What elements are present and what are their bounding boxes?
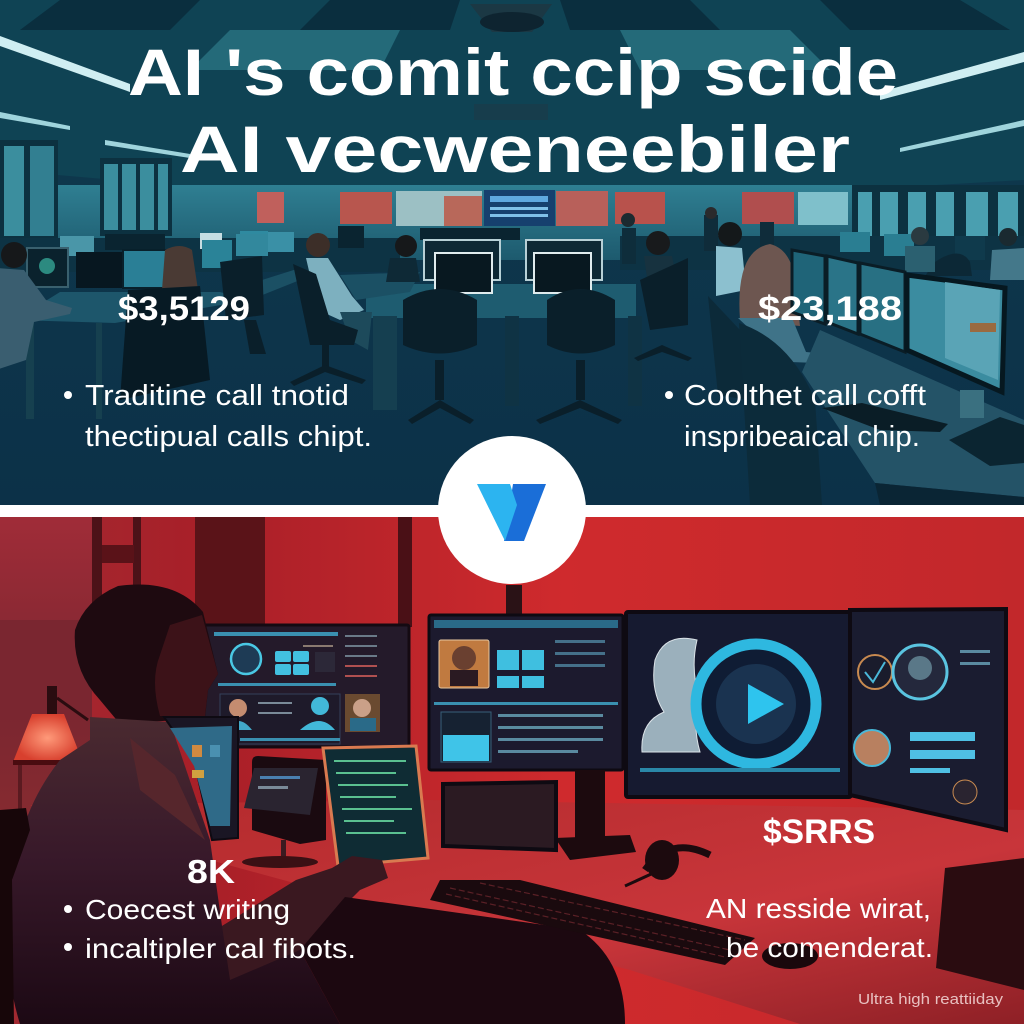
left desks and monitors [15,234,420,419]
divider band [0,505,1024,517]
icon: V logo badge [438,436,586,584]
window and wall columns [0,517,522,857]
person's arm and hand [222,856,388,980]
ceiling [0,0,1024,190]
bullet text: right [665,380,926,453]
monitor: centre dashboard [429,615,623,770]
office chairs [220,256,822,505]
title [128,35,898,186]
chair foreground [300,897,625,1024]
tablets and devices [164,717,556,868]
central desks with monitors [366,240,642,410]
bullet text: left [64,380,372,453]
text block: right: be comenderat. [726,932,933,963]
stat: right value: $23,188 [758,290,902,328]
text block: right: AN resside wirat, [706,893,931,924]
right desk and monitor row [792,250,1024,505]
bullet text: left: Traditine call tnotid [85,380,349,412]
seated agents on the left [0,233,420,400]
desk surface [30,800,1024,1024]
bullet text: right: inspribeaical chip. [684,421,920,453]
bullet text: left: thectipual calls chipt. [85,421,372,453]
bullet text: left: Coecest writing [85,894,290,925]
panel: traditional call centre [0,0,1024,505]
monitor: centre video with play button [626,612,851,797]
bullet text: left: incaltipler cal fibots. [85,933,356,964]
back wall and windows [0,140,1024,260]
agents on the right [644,222,850,364]
stat: right value: $SRRS [763,813,875,851]
bullet text: right: Coolthet call cofft [684,380,926,412]
caption: Ultra high reattiiday [858,991,1004,1008]
wall screens [257,190,848,226]
stat: left value: $3,5129 [118,290,250,328]
bullet text: left [64,894,356,964]
back rows of desks [0,207,1024,280]
monitor: right profile panel [850,609,1006,830]
panel: AI-assisted workstation [0,517,1024,1024]
text block: right [706,893,933,963]
headphones [625,840,710,886]
title: AI 's comit ccip scide [128,35,898,109]
icon: ceiling projector [470,4,552,32]
monitor: back left video call [200,625,409,747]
stat: left value: 8K [187,853,235,890]
mouse [762,943,818,969]
icon: table lamp [13,686,88,815]
monitor stand [555,770,636,860]
person at desk [0,584,350,1024]
keyboard [430,880,755,965]
title: AI vecweneebiler [180,112,850,186]
speaker [936,858,1024,990]
